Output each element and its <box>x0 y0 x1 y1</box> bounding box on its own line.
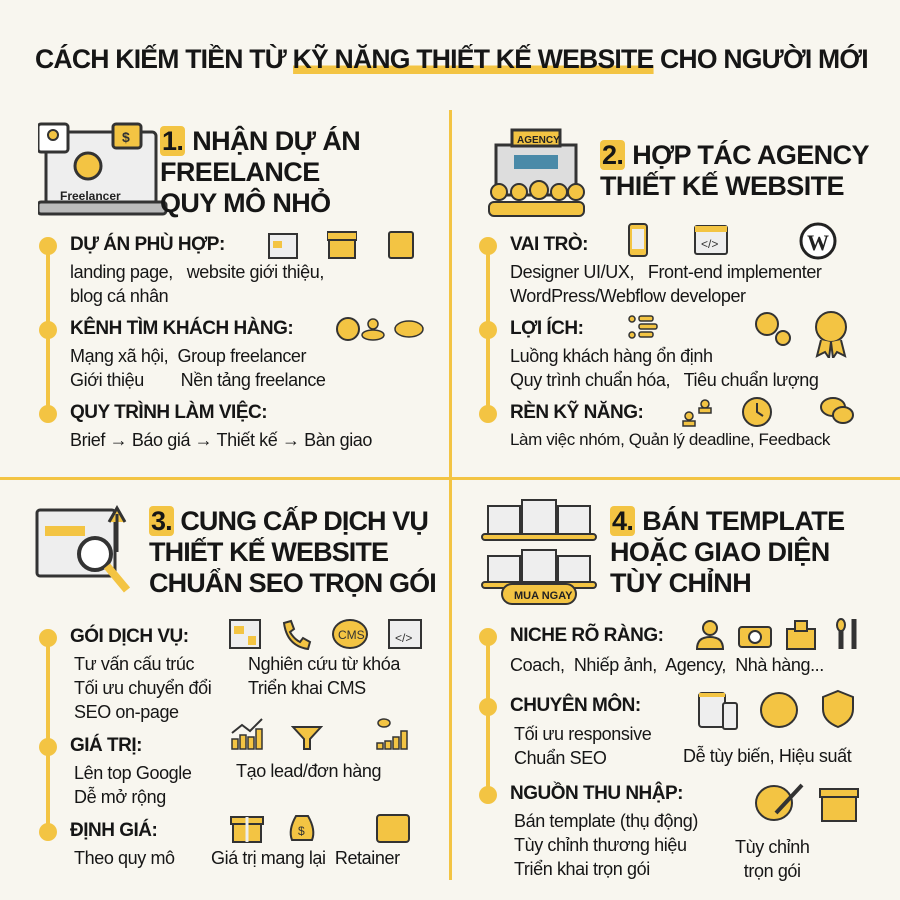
heading 1: FREELANCE <box>160 157 320 187</box>
bullet: dinh gia: Theo quy mô <box>74 848 175 868</box>
panel: 2 agency <box>479 128 869 449</box>
panel: 3 seo <box>36 505 436 868</box>
icon: freelancer laptop: $ <box>122 129 130 145</box>
bullet: ren ky nang: Làm việc nhóm, Quản lý deadline, Feedback <box>510 430 830 449</box>
bullet: niche: NICHE RÕ RÀNG: <box>510 625 663 646</box>
bullet: ren ky nang <box>479 397 854 449</box>
bullet: gia tri: GIÁ TRỊ: <box>70 735 142 756</box>
heading 2: THIẾT KẾ WEBSITE <box>600 171 844 201</box>
bullet: chuyen mon: CHUYÊN MÔN: <box>510 695 641 716</box>
bullet: dinh gia: ĐỊNH GIÁ: <box>70 820 157 841</box>
bullet: loi ich: LỢI ÍCH: <box>510 318 583 339</box>
dividers <box>449 110 452 880</box>
heading 4 <box>610 506 845 598</box>
bullet: goi dich vu <box>39 619 422 722</box>
bullet: niche: Coach, Nhiếp ảnh, Agency, Nhà hàng... <box>510 655 824 675</box>
bullet: goi dich vu: Tối ưu chuyển đổi <box>74 678 211 698</box>
heading 2 <box>600 140 869 201</box>
icon: seo browser magnifier <box>36 505 130 592</box>
bullet: quy trinh: Brief → Báo giá → Thiết kế → Bàn giao <box>70 430 372 450</box>
heading 3: 3. CUNG CẤP DỊCH VỤ <box>151 506 428 536</box>
bullet: goi dich vu: CMS <box>338 628 365 642</box>
bullet: kenh tim khach hang: Mạng xã hội, Group freelancer <box>70 346 306 366</box>
heading 2: 2. HỢP TÁC AGENCY <box>602 140 869 170</box>
bullet: chuyen mon <box>479 690 854 768</box>
bullet: goi dich vu: Triển khai CMS <box>248 678 366 698</box>
bullet: gia tri: Dễ mở rộng <box>74 787 166 807</box>
icon: freelancer laptop <box>38 122 168 216</box>
bullet: vai tro: WordPress/Webflow developer <box>510 286 746 306</box>
bullet: du an phu hop: DỰ ÁN PHÙ HỢP: <box>70 234 225 255</box>
bullet: kenh tim khach hang <box>39 316 424 390</box>
bullet: goi dich vu: </> <box>395 631 412 645</box>
bullet: nguon thu nhap: trọn gói <box>744 861 801 881</box>
bullet: goi dich vu: SEO on-page <box>74 702 179 722</box>
bullet: kenh tim khach hang: Giới thiệu Nền tảng freelance <box>70 370 326 390</box>
bullet: nguon thu nhap: NGUỒN THU NHẬP: <box>510 783 683 804</box>
bullet: chuyen mon: Chuẩn SEO <box>514 748 606 768</box>
bullet: quy trinh: QUY TRÌNH LÀM VIỆC: <box>70 402 267 423</box>
bullet: vai tro: VAI TRÒ: <box>510 234 588 255</box>
bullet: vai tro <box>479 222 836 306</box>
heading 1: QUY MÔ NHỎ <box>160 188 331 218</box>
bullet: loi ich: Quy trình chuẩn hóa, Tiêu chuẩn lượng <box>510 370 818 390</box>
heading 1: 1. NHẬN DỰ ÁN <box>162 126 360 156</box>
bullet: dinh gia: $ <box>298 824 305 838</box>
bullet: ren ky nang: RÈN KỸ NĂNG: <box>510 402 643 423</box>
heading 3 <box>149 506 436 598</box>
heading 4: HOẶC GIAO DIỆN <box>610 537 830 567</box>
icon: templates mua ngay: MUA NGAY <box>514 590 573 602</box>
heading 1 <box>160 126 360 218</box>
bullet: gia tri: Tạo lead/đơn hàng <box>236 761 381 781</box>
title: CÁCH KIẾM TIỀN TỪ KỸ NĂNG THIẾT KẾ WEBSITE CHO NGƯỜI MỚI <box>35 44 868 74</box>
icon: agency building: AGENCY <box>517 135 560 146</box>
bullet: loi ich <box>479 311 847 390</box>
bullet: nguon thu nhap: Bán template (thụ động) <box>514 811 698 831</box>
bullet: vai tro: W <box>807 230 829 255</box>
bullet: du an phu hop: landing page, website giới thiệu, <box>70 262 324 282</box>
heading 4: 4. BÁN TEMPLATE <box>612 506 845 536</box>
heading 3: THIẾT KẾ WEBSITE <box>149 537 388 567</box>
bullet: vai tro: </> <box>701 237 718 251</box>
bullet: chuyen mon: Tối ưu responsive <box>514 724 651 744</box>
bullet: vai tro: Designer UI/UX, Front-end implementer <box>510 262 822 282</box>
bullet: goi dich vu: GÓI DỊCH VỤ: <box>70 626 189 647</box>
icon: freelancer laptop: Freelancer <box>60 189 121 203</box>
bullet: chuyen mon: Dễ tùy biến, Hiệu suất <box>683 746 851 766</box>
icon: agency building <box>488 128 585 217</box>
bullet: dinh gia <box>39 814 410 868</box>
panel: 4 template <box>479 499 859 881</box>
bullet: nguon thu nhap <box>479 782 859 881</box>
bullet: kenh tim khach hang: KÊNH TÌM KHÁCH HÀNG: <box>70 318 293 339</box>
bullet: du an phu hop <box>39 231 414 306</box>
bullet: nguon thu nhap: Tùy chỉnh thương hiệu <box>514 835 687 855</box>
bullet: gia tri: Lên top Google <box>74 763 192 783</box>
bullet: gia tri <box>39 718 408 807</box>
bullet: nguon thu nhap: Tùy chỉnh <box>735 837 809 857</box>
heading 3: CHUẨN SEO TRỌN GÓI <box>149 568 436 598</box>
bullet: niche <box>479 618 856 675</box>
bullet: goi dich vu: Tư vấn cấu trúc <box>74 654 194 674</box>
icon: templates mua ngay <box>481 499 597 605</box>
bullet: loi ich: Luồng khách hàng ổn định <box>510 346 713 366</box>
bullet: du an phu hop: blog cá nhân <box>70 286 168 306</box>
bullet: nguon thu nhap: Triển khai trọn gói <box>514 859 650 879</box>
bullet: goi dich vu: Nghiên cứu từ khóa <box>248 654 400 674</box>
heading 4: TÙY CHỈNH <box>610 568 751 598</box>
bullet: quy trinh <box>39 400 372 450</box>
bullet: dinh gia: Giá trị mang lại Retainer <box>211 848 400 868</box>
panel: 1 freelance <box>38 122 424 450</box>
